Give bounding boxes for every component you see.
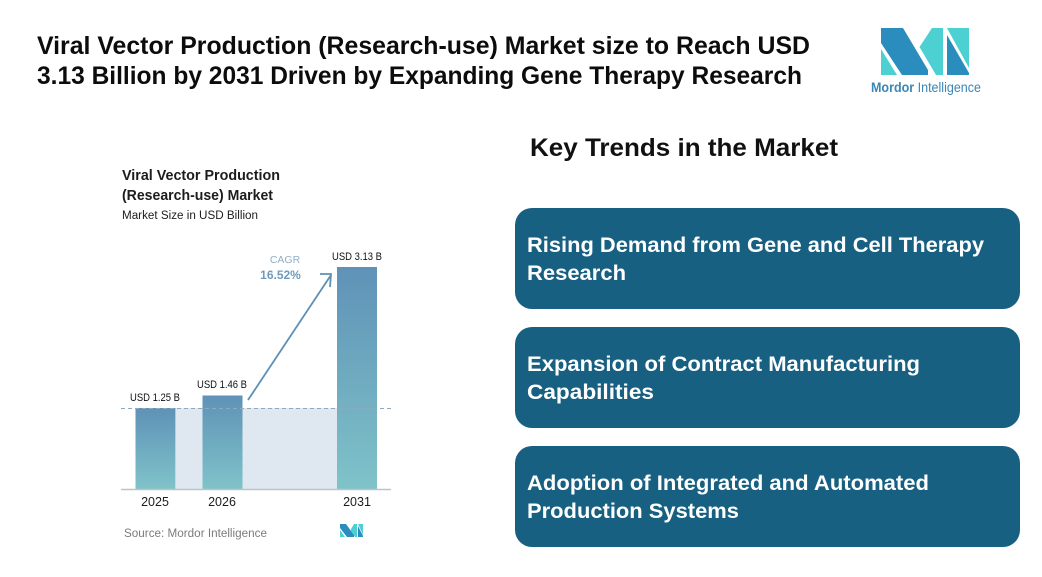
logo: Mordor Intelligence [871,28,981,95]
trend card 2: Capabilities [527,381,654,404]
trend card 1: Research [527,262,626,285]
chart heading [122,168,280,222]
trend card 1: Rising Demand from Gene and Cell Therapy [527,234,984,257]
trend card 3 [515,446,1020,547]
trend card 2: Expansion of Contract Manufacturing [527,353,920,376]
trend card 2 [515,327,1020,428]
small logo [340,524,363,537]
heading: key trends: Key Trends in the Market [530,134,839,162]
bar value labels: USD 1.46 B [197,379,247,391]
year axis labels [141,495,371,509]
title: 3.13 Billion by 2031 Driven by Expanding Gene Therapy Research [37,62,802,90]
arrow: growth [248,274,331,400]
year axis labels: 2025 [141,495,169,509]
bar value labels: USD 1.25 B [130,392,180,404]
year axis labels: 2026 [208,495,236,509]
shaded band between 2025 and 2031 [176,408,337,489]
trend card 3: Adoption of Integrated and Automated [527,472,929,495]
bar: 2031 [337,267,377,489]
CAGR callout: 16.52% [260,268,301,282]
trend card 3: Production Systems [527,500,739,523]
year axis labels: 2031 [343,495,371,509]
chart heading: (Research-use) Market [122,188,273,204]
bar: 2025 [136,408,176,489]
bar: 2026 [202,396,242,489]
trend card 1 [515,208,1020,309]
title: Viral Vector Production (Research-use) Market size to Reach USD [37,32,810,60]
chart panel: market size [121,168,393,540]
bar value labels [130,251,382,404]
chart heading: Viral Vector Production [122,168,280,184]
bar value labels: USD 3.13 B [332,251,382,263]
logo: Mordor Intelligence: Mordor Intelligence [871,79,981,95]
CAGR callout: CAGR [270,254,301,266]
source note: Source: Mordor Intelligence [124,528,267,540]
CAGR callout [260,254,301,282]
chart heading: Market Size in USD Billion [122,210,258,222]
title [37,32,810,90]
